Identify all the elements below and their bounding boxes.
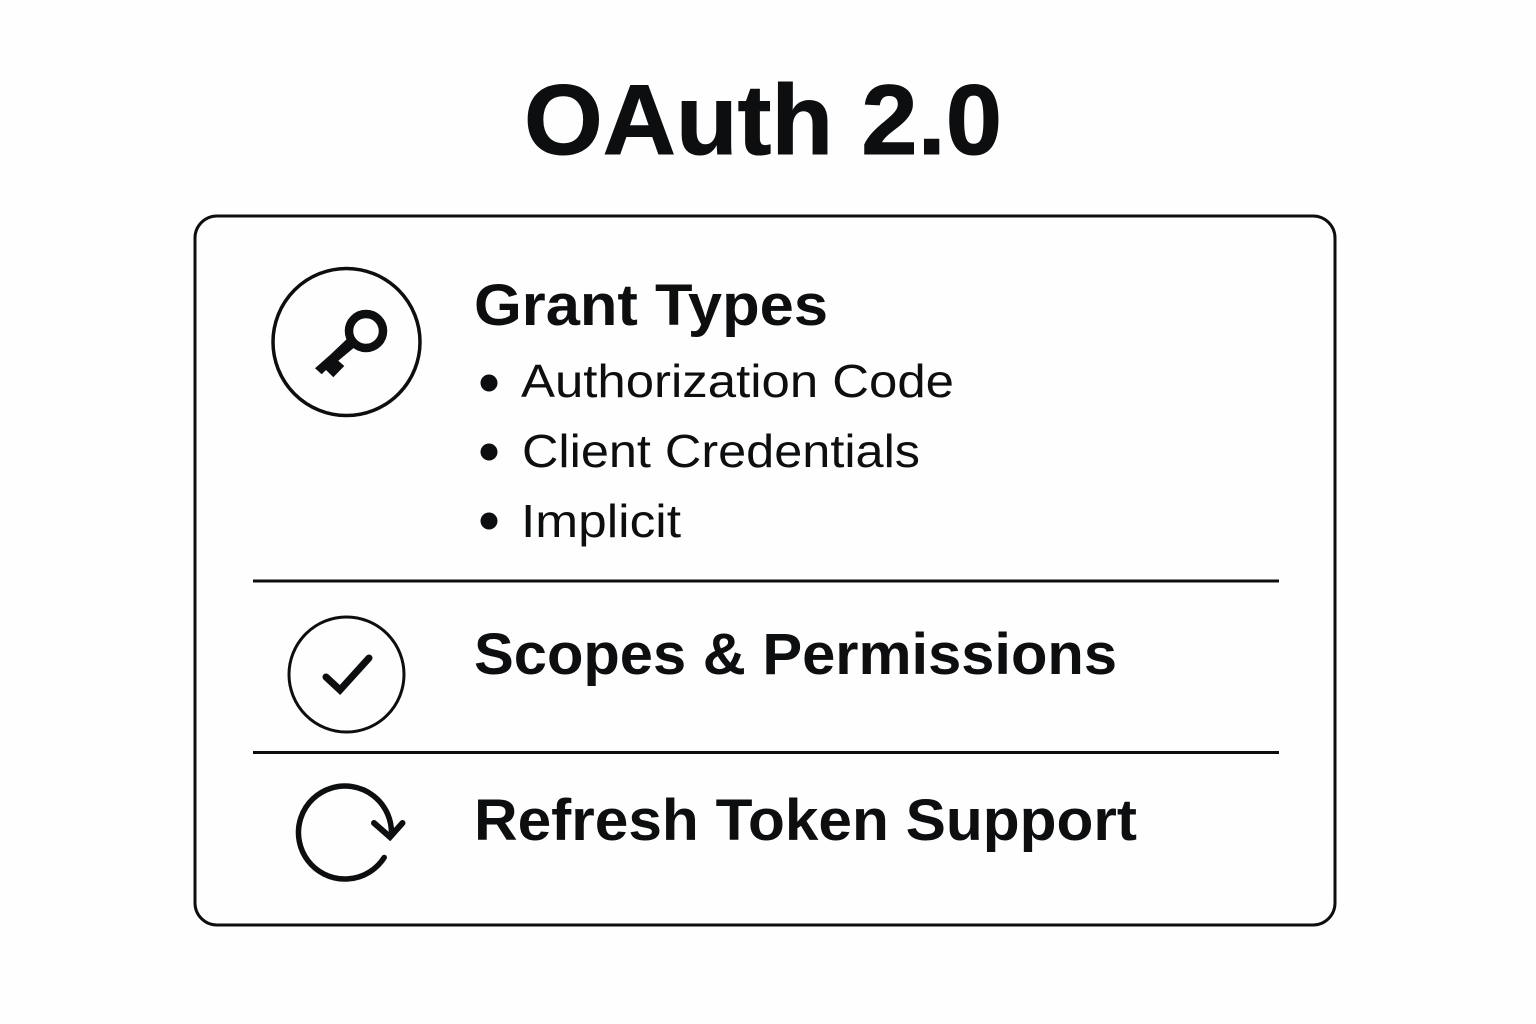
icon: key <box>273 268 420 416</box>
heading: Scopes & Permissions: Scopes & Permissions <box>474 622 1117 687</box>
list: grant types: Authorization Code <box>521 355 954 407</box>
icon: refresh <box>298 786 402 879</box>
title: OAuth 2.0 <box>524 64 1002 175</box>
list: grant types: Implicit <box>521 495 681 547</box>
heading: Refresh Token Support: Refresh Token Support <box>474 788 1137 853</box>
panel: OAuth features <box>195 216 1335 925</box>
list: grant types: Client Credentials <box>522 425 920 477</box>
list: grant types <box>480 355 954 547</box>
heading: Grant Types: Grant Types <box>474 273 828 338</box>
icon: check mark <box>289 617 404 732</box>
